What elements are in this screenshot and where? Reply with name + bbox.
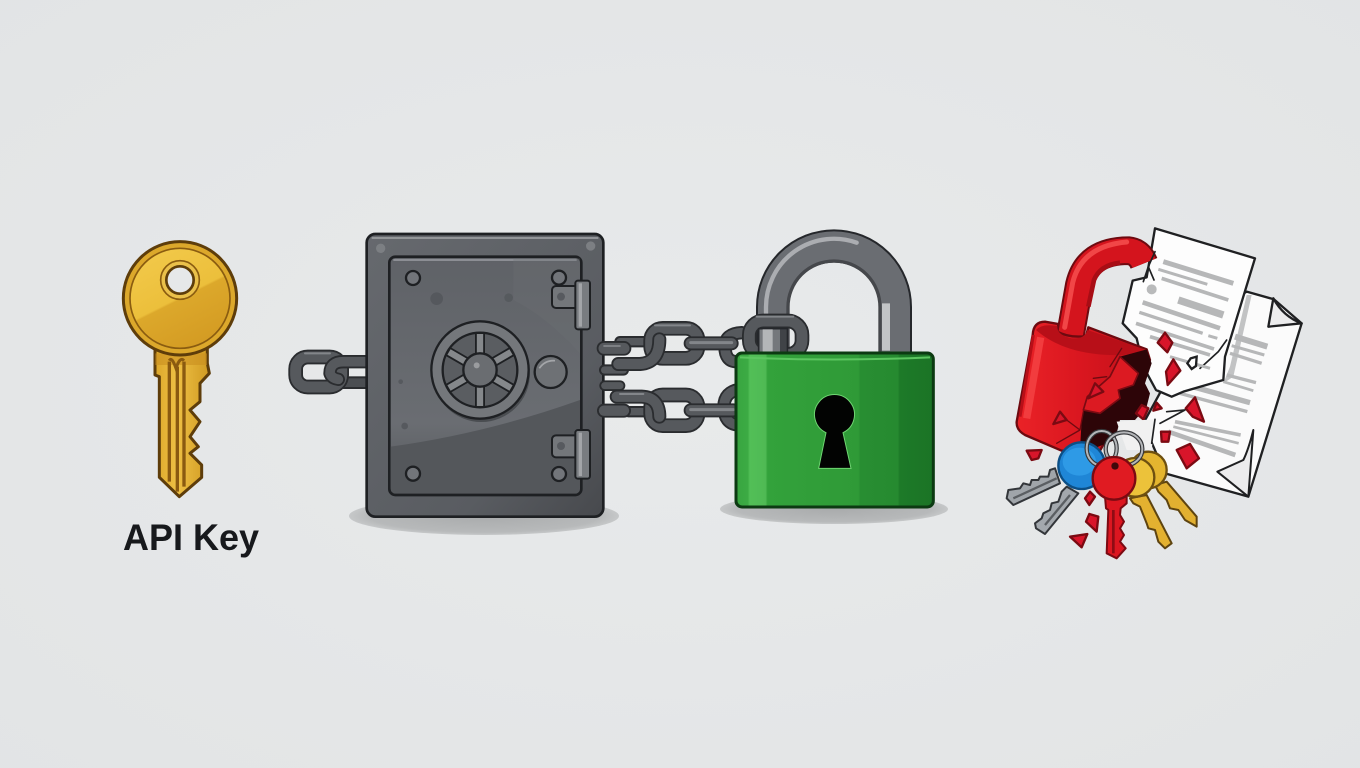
icon: gold API key [123, 242, 237, 497]
green padlock [736, 239, 933, 507]
back document lines [1168, 337, 1267, 455]
label: API Key: API Key [123, 517, 259, 558]
front document [1123, 228, 1255, 397]
blue key head [1058, 442, 1105, 489]
broken red padlock, documents and keys [1007, 228, 1302, 558]
key blade [155, 347, 209, 497]
upper chain [604, 325, 742, 370]
shackle [766, 239, 895, 353]
bottom hinge [552, 430, 590, 479]
broken cavity [1080, 349, 1152, 450]
safe shadow [349, 497, 619, 535]
keyhole [814, 395, 854, 468]
red shards [1027, 333, 1204, 547]
top hinge [552, 281, 590, 329]
safe [367, 234, 603, 517]
safe door [389, 257, 581, 495]
chain link on shackle [749, 317, 802, 354]
key head [123, 242, 237, 355]
back document [1143, 292, 1302, 497]
safe body [367, 234, 603, 517]
side knob [535, 356, 567, 388]
front document lines [1136, 262, 1233, 368]
chains between safe and padlock [604, 325, 742, 426]
rivets [406, 271, 566, 481]
lower chain [604, 386, 740, 426]
red key [1093, 457, 1135, 558]
padlock shadow [720, 494, 948, 524]
padlock body [736, 353, 933, 507]
yellow keys [1116, 452, 1197, 548]
left chain [296, 353, 370, 388]
white torn scrap [1117, 410, 1185, 450]
dial wheel [431, 321, 530, 422]
red padlock body [1017, 322, 1150, 451]
key rings [1087, 431, 1142, 466]
lock cracks [1057, 348, 1122, 443]
gray keys [1007, 468, 1078, 534]
key hole [161, 261, 199, 299]
red shackle [1065, 242, 1155, 337]
